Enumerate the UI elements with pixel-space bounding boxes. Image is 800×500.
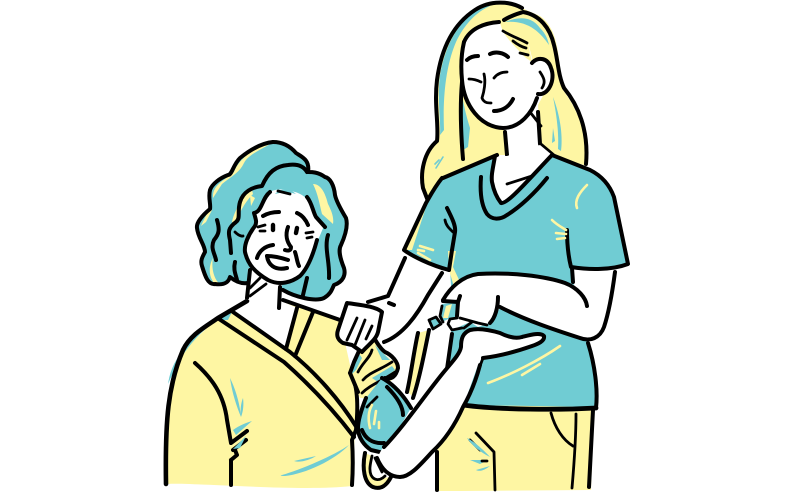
patient features: [257, 212, 313, 269]
nurse pants: [436, 400, 594, 491]
shirt highlights: [418, 185, 587, 383]
patient figure: [165, 142, 357, 488]
patient forearm and hand: [377, 328, 544, 477]
blood pressure tube: [364, 317, 441, 488]
nurse left forearm: [368, 258, 442, 342]
nurse eyebrows, eyes, nose, mouth: [467, 53, 513, 111]
patient hair: [197, 142, 347, 299]
nurse right arm and hand: [443, 272, 615, 340]
nurse hair: [422, 3, 587, 202]
patient neck: [246, 268, 282, 308]
patient gown: [165, 298, 357, 488]
blood pressure cuff: [358, 378, 411, 453]
nurse left hand: [337, 258, 442, 352]
gown sleeve ruffle: [350, 336, 398, 398]
gown shading: [230, 378, 349, 476]
nurse scrub top: [404, 145, 628, 409]
squeeze bulb: [440, 302, 459, 322]
nurse face and neck: [461, 22, 553, 203]
patient face: [245, 190, 325, 283]
nurse figure: [368, 3, 628, 491]
